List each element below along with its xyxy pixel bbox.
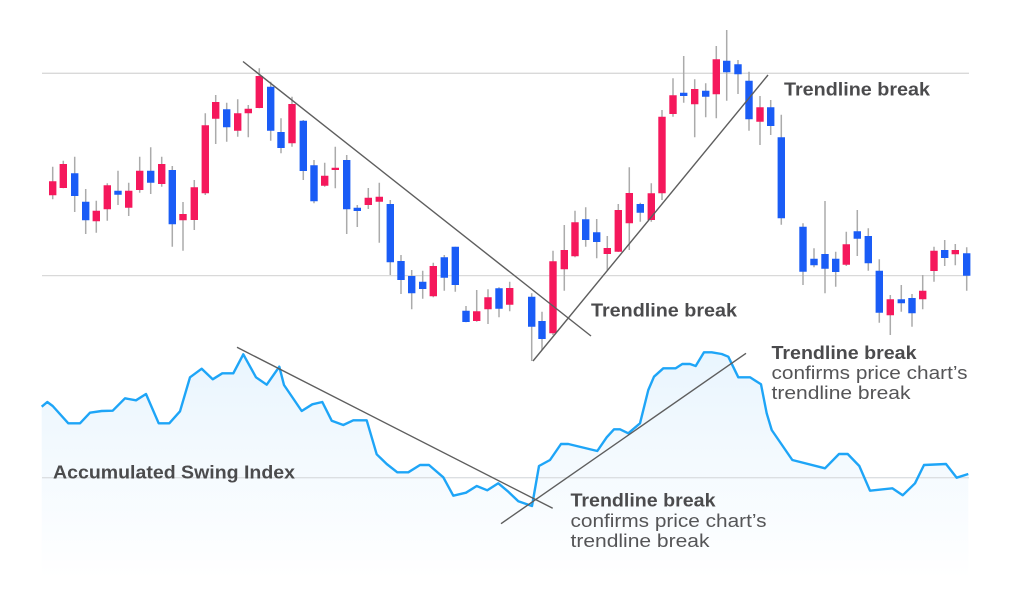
red candle bodies <box>53 59 955 333</box>
ascending indicator trendline <box>501 353 746 524</box>
descending price trendline <box>243 62 591 336</box>
callout: lower indicator trendline break <box>570 490 766 551</box>
blue candle bodies <box>75 61 967 339</box>
callout: upper indicator trendline break: trendline break <box>772 383 912 403</box>
ascending price trendline <box>533 75 768 361</box>
candlesticks <box>53 30 967 361</box>
indicator line <box>42 352 968 506</box>
callout: lower indicator trendline break: trendline break <box>570 531 711 551</box>
callout: lower indicator trendline break: confirms price chart’s <box>570 511 766 531</box>
callout: upper indicator trendline break: Trendline break <box>772 343 918 363</box>
indicator area fill <box>42 352 968 578</box>
label: Accumulated Swing Index: Accumulated Swing Index <box>53 462 295 482</box>
callout: upper indicator trendline break <box>772 343 968 403</box>
callout: upper indicator trendline break: confirms price chart’s <box>772 363 968 383</box>
price chart <box>42 30 969 361</box>
descending indicator trendline <box>237 347 553 508</box>
candle wicks <box>53 30 967 361</box>
label: lower trendline break: Trendline break <box>591 300 738 320</box>
callout: lower indicator trendline break: Trendline break <box>570 490 717 510</box>
indicator chart: Accumulated Swing Index <box>42 347 969 578</box>
label: upper trendline break: Trendline break <box>784 80 931 100</box>
